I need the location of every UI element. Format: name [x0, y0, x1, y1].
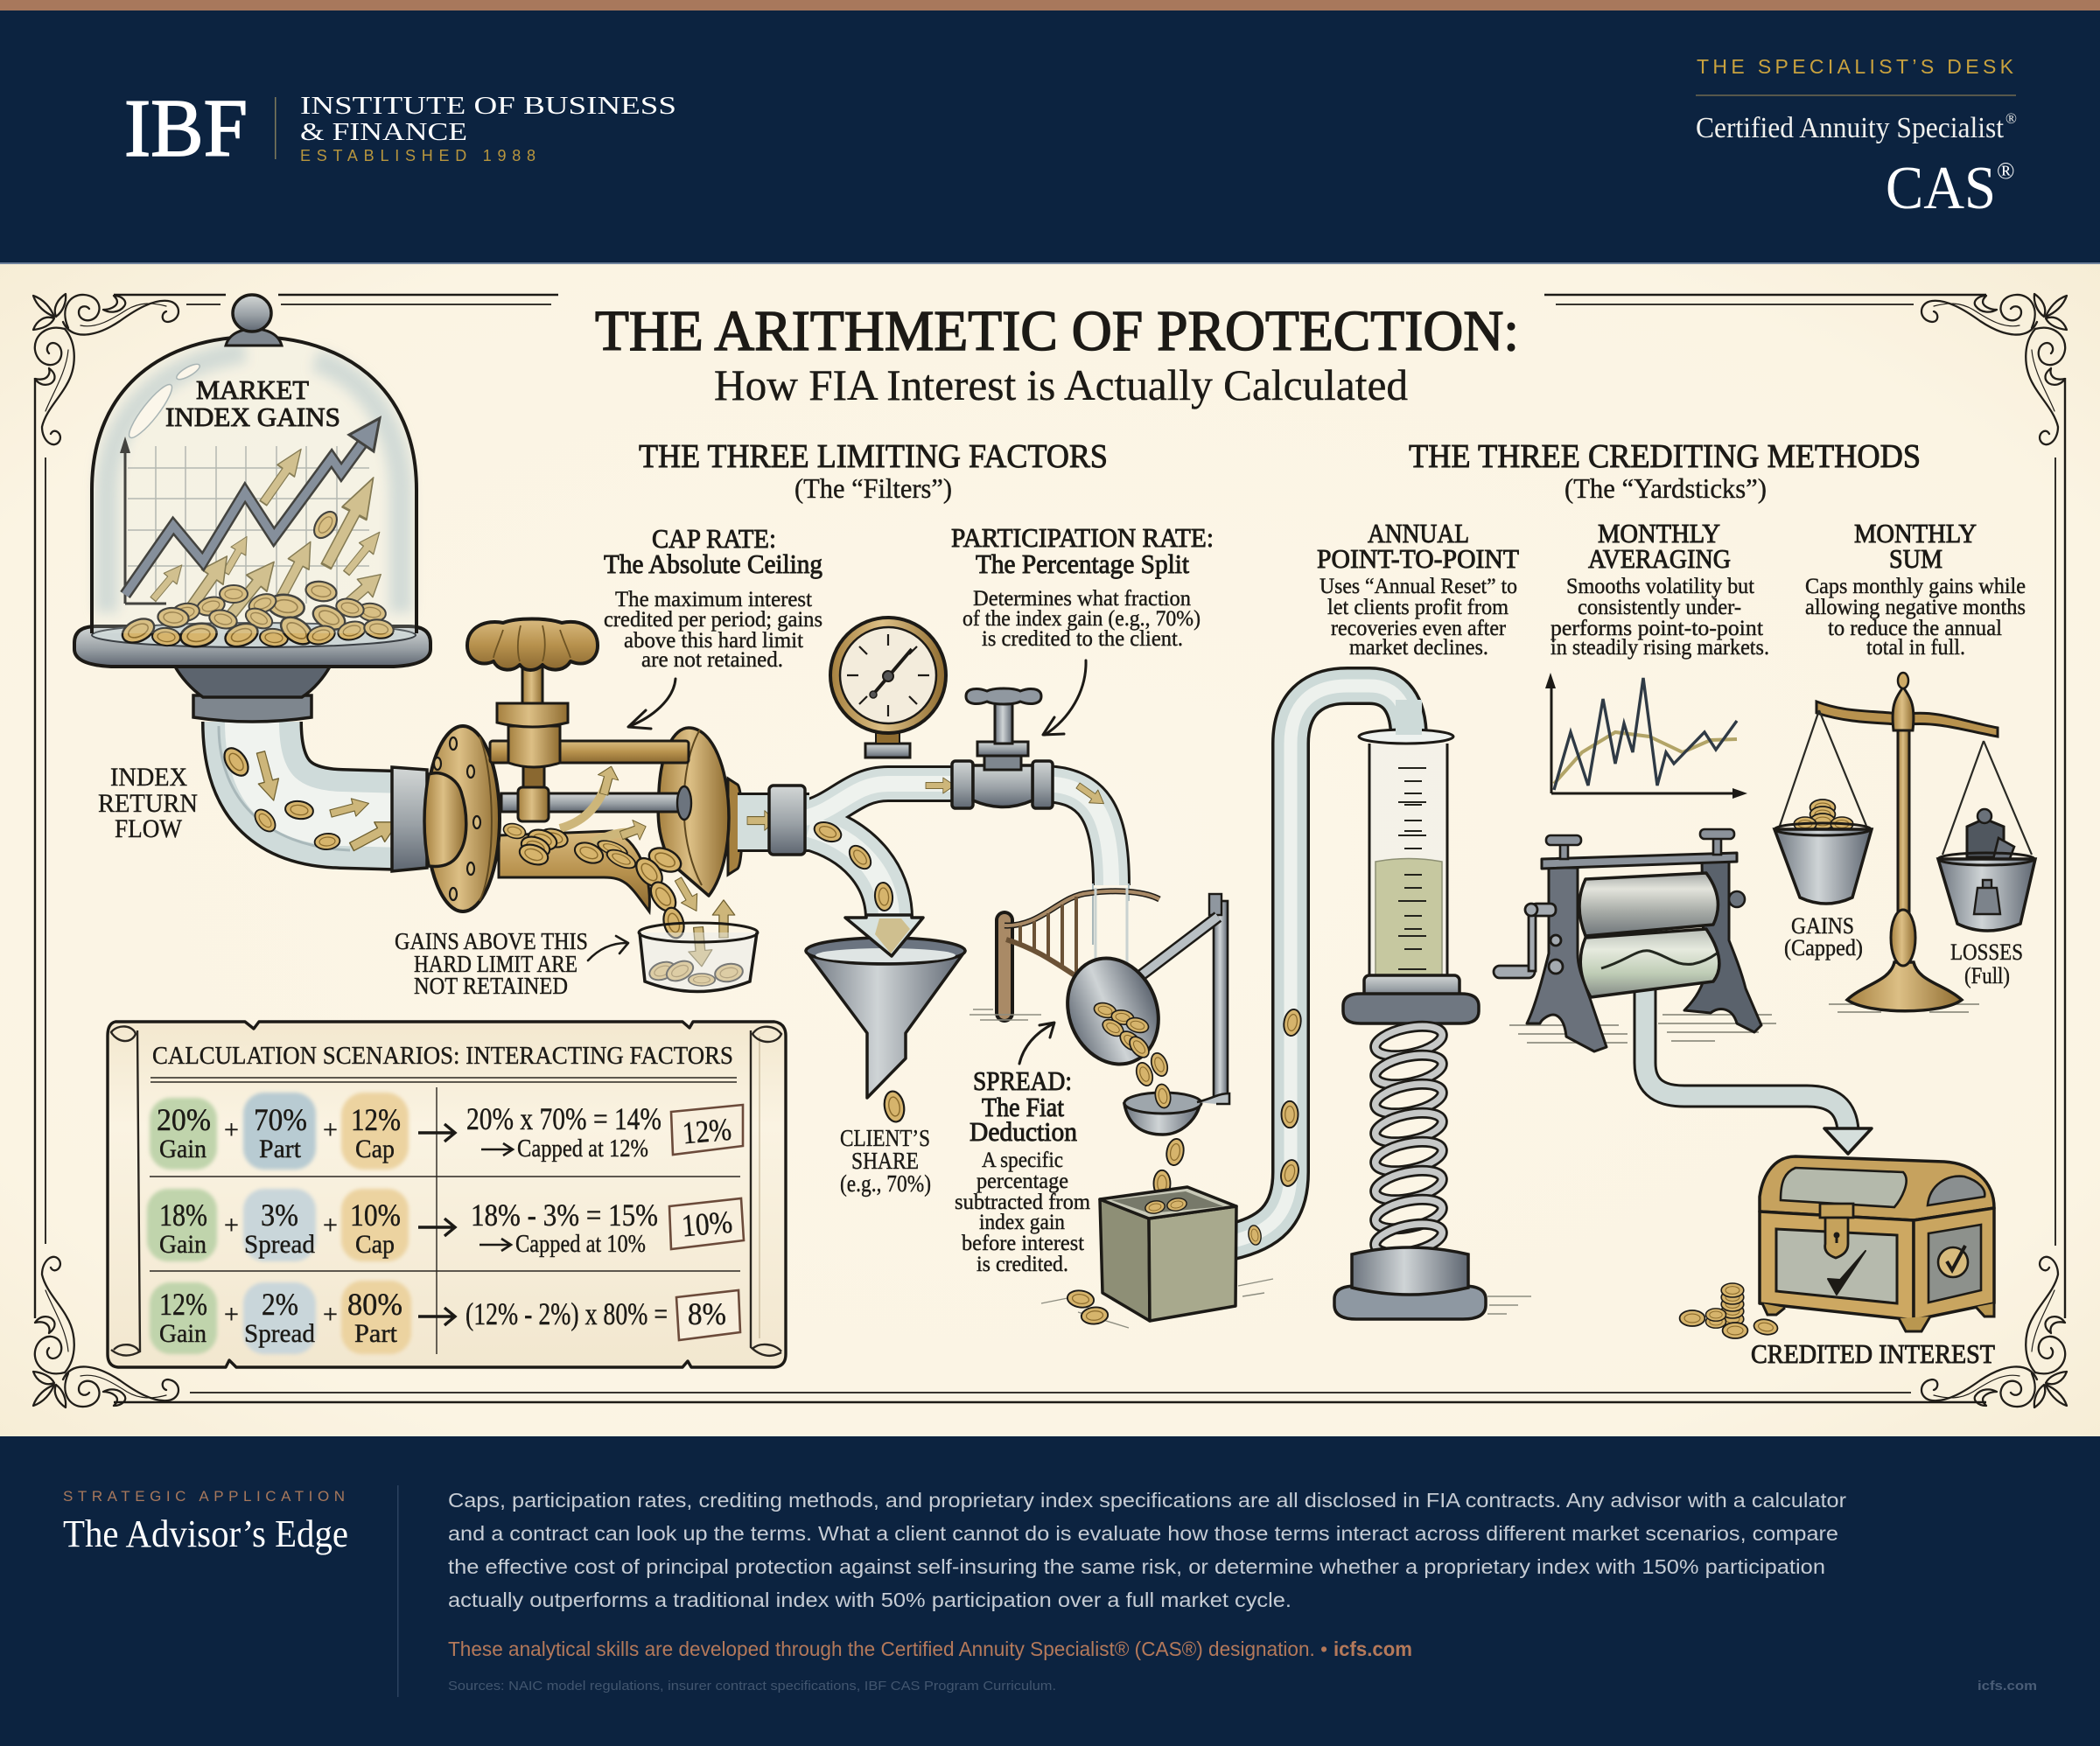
- title: THE ARITHMETIC OF PROTECTION:: [595, 299, 1519, 363]
- CAS: CAS: [1886, 155, 1996, 222]
- desk rule: [1696, 94, 2016, 96]
- right flange rim: [684, 730, 702, 885]
- row 3 chips: 80%: [347, 1287, 402, 1322]
- text block: monthly averaging: performs point-to-point: [1550, 617, 1763, 640]
- row 2 formula: 10%: [680, 1205, 734, 1243]
- text block: monthly averaging: MONTHLY: [1598, 518, 1720, 548]
- right frame: [1684, 862, 1761, 1032]
- text block: cap rate: [604, 523, 822, 672]
- footer eyebrow: STRATEGIC APPLICATION: [63, 1488, 345, 1505]
- label: gains above this hard limit: [395, 928, 588, 999]
- label: credited interest: CREDITED INTEREST: [1751, 1338, 1995, 1369]
- top brass rod: [490, 741, 689, 763]
- row 2 formula: 18% - 3% = 15%: [471, 1198, 658, 1233]
- text block: annual point-to-point: POINT-TO-POINT: [1317, 543, 1519, 574]
- text block: cap rate: CAP RATE:: [652, 523, 776, 554]
- tick marks: [1398, 768, 1426, 969]
- logo divider: [275, 97, 276, 159]
- row 3 formula: +: [323, 1300, 338, 1329]
- footer sources: Sources: NAIC model regulations, insurer contract specifications, IBF CAS Program Curriculum.: [448, 1679, 1056, 1694]
- row 2 chips: Spread: [244, 1230, 315, 1259]
- right bucket with weights: [1938, 809, 2035, 931]
- arrow: cap rate callout: [628, 679, 676, 729]
- row 2 chips: 18%: [159, 1198, 207, 1233]
- specialist desk label: THE SPECIALIST’S DESK: [1697, 55, 2014, 78]
- row 1 chips: Cap: [355, 1135, 395, 1163]
- right flange: [658, 728, 729, 896]
- row 1 formula: Capped at 12%: [517, 1135, 648, 1163]
- text block: annual point-to-point: market declines.: [1349, 636, 1488, 660]
- faded pipe end: [1096, 888, 1127, 980]
- registered mark large: ®: [1997, 157, 2015, 184]
- scale base: [1847, 962, 1962, 1011]
- label: gains capped: (Capped): [1784, 935, 1863, 960]
- text block: monthly sum: MONTHLY: [1854, 518, 1977, 548]
- header band: [0, 10, 2100, 264]
- beam: [1816, 702, 1998, 737]
- arrow: participation callout: [1043, 660, 1086, 735]
- valve knob: [467, 619, 598, 670]
- dome knob: [226, 295, 282, 346]
- illustration: long U pipe to cylinder: [1229, 686, 1409, 1246]
- heading: limiting factors: THE THREE LIMITING FACTORS: [639, 438, 1108, 475]
- glass tube: [1369, 744, 1447, 983]
- ladle: [1124, 1083, 1229, 1135]
- label: losses full: (Full): [1964, 963, 2010, 988]
- footer divider: [397, 1485, 399, 1697]
- row 3 chips: [150, 1281, 411, 1354]
- scoop bowl: [1052, 945, 1174, 1078]
- chart axes: [120, 436, 166, 604]
- text block: participation rate: is credited to the client.: [982, 627, 1183, 651]
- parchment panel: [0, 264, 2100, 1436]
- text block: cap rate: The Absolute Ceiling: [604, 548, 822, 579]
- text block: participation rate: of the index gain (e.g., 70%): [962, 607, 1200, 631]
- arrow: spread callout: [1019, 1023, 1054, 1064]
- illustration: graduated cylinder: [1343, 700, 1479, 1023]
- pipe right of flange: [728, 779, 742, 875]
- bolts: [1546, 829, 1734, 859]
- coin pile: [119, 579, 395, 651]
- chest front: [1760, 1212, 1914, 1320]
- illustration: funnel: [806, 915, 965, 1123]
- text block: participation rate: PARTICIPATION RATE:: [951, 522, 1214, 553]
- row 3 formula: [224, 1290, 740, 1340]
- footer body copy: actually outperforms a traditional index with 50% participation over a full market cycle.: [448, 1589, 1292, 1611]
- footer call to action: icfs.com: [1334, 1638, 1412, 1660]
- label: client's share: SHARE: [851, 1148, 919, 1174]
- text block: spread: A specific: [982, 1149, 1063, 1172]
- institute name: & FINANCE: [300, 118, 467, 146]
- row 2 chips: [147, 1189, 409, 1261]
- bridge railing: [970, 891, 1159, 1020]
- arrow: to cup: [588, 936, 628, 960]
- coins and arrows in pipe: [747, 778, 1109, 911]
- row 2 formula: [224, 1198, 744, 1258]
- panel: calculation scenarios scroll: [108, 1022, 786, 1367]
- text block: monthly sum: [1805, 518, 2026, 660]
- scroll title: CALCULATION SCENARIOS: INTERACTING FACTORS: [152, 1042, 733, 1070]
- row 2 formula: +: [224, 1211, 239, 1240]
- subheading: yardsticks: (The “Yardsticks”): [1564, 472, 1767, 504]
- label: gains capped: [1784, 913, 1863, 960]
- text block: annual point-to-point: let clients profit from: [1327, 596, 1509, 619]
- certified annuity specialist: Certified Annuity Specialist: [1696, 112, 2005, 144]
- illustration: roller press: [1494, 829, 1872, 1154]
- label: gains above this hard limit: NOT RETAINED: [414, 973, 568, 999]
- footer body copy: the effective cost of principal protection against self-insuring the same risk, or determine whether a proprietary index with 150% participation: [448, 1555, 1825, 1578]
- text block: monthly averaging: Smooths volatility but: [1566, 575, 1754, 598]
- illustration: participation tap: [966, 688, 1041, 807]
- collars: [769, 761, 1053, 855]
- row 2 chips: 10%: [350, 1198, 401, 1233]
- label: index return flow: INDEX: [110, 763, 187, 792]
- valve stem and bonnet: [497, 665, 568, 821]
- label: index return flow: [98, 763, 198, 843]
- chart: monthly averaging volatility: [1545, 673, 1747, 799]
- text block: spread: The Fiat: [982, 1092, 1064, 1122]
- row 3 formula: (12% - 2%) x 80% =: [466, 1296, 668, 1331]
- heading: crediting methods: THE THREE CREDITING METHODS: [1409, 438, 1921, 475]
- row 1 formula: 12%: [681, 1112, 732, 1150]
- label: index return flow: RETURN: [98, 789, 198, 818]
- text block: spread: before interest: [962, 1232, 1084, 1255]
- institute name: INSTITUTE OF BUSINESS: [300, 92, 676, 120]
- chest lid: [1760, 1156, 1994, 1220]
- chest feet: [1762, 1303, 1994, 1331]
- inner brass sleeve: [424, 773, 466, 866]
- crank: [1494, 904, 1563, 978]
- text block: annual point-to-point: [1317, 518, 1519, 660]
- subtitle: How FIA Interest is Actually Calculated: [714, 360, 1408, 409]
- scroll rolls: [111, 1026, 781, 1356]
- coin falling: [310, 507, 341, 542]
- illustration: catch cup for excess gains: [639, 900, 758, 992]
- text block: spread: [955, 1065, 1091, 1276]
- row 1 formula: [224, 1101, 743, 1163]
- label: gains above this hard limit: HARD LIMIT ARE: [414, 951, 578, 977]
- text block: participation rate: The Percentage Split: [976, 548, 1189, 579]
- top roller: [1579, 873, 1718, 936]
- top bar: [1542, 853, 1737, 869]
- liquid: [1376, 859, 1442, 980]
- registered mark small: ®: [2006, 110, 2017, 127]
- row 3 chips: Spread: [244, 1319, 315, 1348]
- row 3 formula: +: [224, 1300, 239, 1329]
- text block: spread: percentage: [976, 1170, 1068, 1193]
- glass tint: [107, 352, 401, 612]
- row 2 formula: Capped at 10%: [515, 1230, 646, 1258]
- illustration: balance scale: [1774, 673, 2035, 1012]
- illustration: spread collection box: [1041, 1187, 1273, 1328]
- subheading: filters: (The “Filters”): [794, 472, 952, 504]
- label: index return flow: FLOW: [115, 814, 183, 843]
- base plate: [1343, 994, 1479, 1023]
- illustration: brass cap-rate filter valve: [424, 619, 742, 940]
- text block: participation rate: Determines what fraction: [973, 587, 1191, 611]
- front checkmark: [1828, 1251, 1866, 1295]
- coins in scoop: [1093, 1001, 1152, 1061]
- chart grid: [128, 446, 369, 604]
- text block: monthly averaging: [1550, 518, 1769, 660]
- footer url: icfs.com: [1978, 1679, 2037, 1694]
- row 3 chips: Gain: [159, 1319, 206, 1348]
- lock: [1820, 1204, 1853, 1258]
- lower brass channel: [499, 831, 649, 911]
- text block: annual point-to-point: ANNUAL: [1368, 518, 1469, 548]
- text block: annual point-to-point: recoveries even after: [1331, 617, 1507, 640]
- illustration: bell jar of market index gains: [74, 295, 430, 722]
- post: [1214, 901, 1228, 1098]
- row 1 chips: 20%: [157, 1102, 211, 1137]
- pillar: [1898, 730, 1909, 916]
- left frame: [1527, 868, 1606, 1051]
- row 1 formula: +: [323, 1115, 338, 1144]
- jar base plate: [74, 623, 430, 722]
- label: client's share: CLIENT’S: [840, 1125, 930, 1151]
- text block: spread: index gain: [979, 1211, 1065, 1234]
- label: client's share: [840, 1125, 931, 1197]
- label: losses full: LOSSES: [1950, 939, 2023, 965]
- illustration: silver pipe network with gauge: [738, 761, 1129, 945]
- illustration: treasure chest: [1680, 1156, 1994, 1338]
- row 3 chips: 2%: [262, 1287, 298, 1322]
- footer band: [0, 1436, 2100, 1746]
- strings: [1780, 710, 2032, 855]
- coin stack: [1680, 1283, 1779, 1338]
- row 3 chips: 12%: [159, 1287, 207, 1322]
- illustration: elbow pipe from bell jar: [219, 722, 427, 871]
- row 2 chips: Gain: [159, 1230, 206, 1259]
- side checkmark: [1938, 1246, 1968, 1277]
- row 2 formula: +: [323, 1211, 338, 1240]
- tan arrows and coins in channel: [502, 764, 704, 940]
- text block: monthly averaging: in steadily rising markets.: [1550, 636, 1769, 660]
- cylinder base: [1364, 975, 1460, 1000]
- label: market index gains: INDEX GAINS: [165, 402, 340, 432]
- falling coins: [1133, 1051, 1186, 1197]
- label: market index gains: MARKET: [196, 374, 309, 405]
- illustration: spring: [1373, 1021, 1445, 1259]
- text block: monthly sum: SUM: [1889, 543, 1942, 574]
- illustration: pressure gauge: [830, 618, 946, 758]
- scoop handle: [1138, 917, 1218, 978]
- top accent bar: [0, 0, 2100, 10]
- text block: monthly averaging: consistently under-: [1578, 596, 1741, 619]
- glass dome: [92, 337, 416, 633]
- text block: monthly sum: allowing negative months: [1805, 596, 2026, 619]
- row 1 formula: +: [224, 1115, 239, 1144]
- table rules: [150, 1078, 740, 1354]
- row 1 chips: [150, 1093, 409, 1170]
- text block: annual point-to-point: Uses “Annual Reset” to: [1320, 575, 1517, 598]
- left flange: [426, 726, 500, 911]
- decorative frame: [33, 294, 2067, 1407]
- steel trend arrow: [125, 418, 380, 595]
- footer call to action: These analytical skills are developed through the Certified Annuity Specialist® (CAS®) designation. •: [448, 1638, 1327, 1660]
- text block: spread: Deduction: [970, 1116, 1077, 1147]
- row 3 formula: 8%: [688, 1296, 726, 1331]
- text block: spread: subtracted from: [955, 1191, 1091, 1214]
- bottom roller: [1580, 929, 1719, 997]
- chest side: [1914, 1208, 1994, 1320]
- row 1 chips: 70%: [254, 1102, 307, 1137]
- text block: monthly sum: Caps monthly gains while: [1805, 575, 2026, 598]
- tan gain arrows: [147, 443, 388, 623]
- logo: IBF: IBF: [124, 83, 248, 174]
- text block: monthly sum: total in full.: [1866, 636, 1965, 660]
- label: market index gains: [165, 374, 340, 432]
- label: gains capped: GAINS: [1791, 913, 1854, 939]
- row 2 chips: Cap: [355, 1230, 395, 1259]
- row 1 chips: Gain: [159, 1135, 206, 1163]
- row 1 chips: Part: [259, 1135, 302, 1163]
- label: losses full: [1950, 939, 2023, 988]
- text block: cap rate: are not retained.: [641, 648, 783, 672]
- text block: monthly averaging: AVERAGING: [1588, 543, 1731, 574]
- label: gains above this hard limit: GAINS ABOVE THIS: [395, 928, 588, 954]
- text block: cap rate: above this hard limit: [624, 629, 803, 653]
- text block: cap rate: credited per period; gains: [604, 608, 822, 632]
- illustration: spread bridge, scoop and ladle: [970, 888, 1229, 1197]
- pipe out of press: [1645, 988, 1872, 1154]
- row 2 chips: 3%: [261, 1198, 298, 1233]
- text block: spread: SPREAD:: [973, 1065, 1072, 1096]
- row 1 chips: 12%: [351, 1102, 401, 1137]
- text block: monthly sum: to reduce the annual: [1828, 617, 2002, 640]
- illustration: spring pedestal: [1334, 1247, 1531, 1319]
- institute name: [300, 92, 676, 146]
- established line: ESTABLISHED 1988: [300, 147, 536, 164]
- label: client's share: (e.g., 70%): [840, 1170, 931, 1197]
- floor hatching: [1509, 1015, 1776, 1043]
- footer body copy: and a contract can look up the terms. What a client cannot do is evaluate how those terms interact across different market scenarios, compare: [448, 1522, 1838, 1545]
- row 3 chips: Part: [354, 1319, 398, 1348]
- footer heading: The Advisor’s Edge: [63, 1512, 348, 1555]
- text block: participation rate: [951, 522, 1214, 651]
- footer body copy: [448, 1489, 1846, 1611]
- row 1 formula: 20% x 70% = 14%: [466, 1101, 662, 1136]
- front panel: [1776, 1229, 1897, 1303]
- text block: spread: is credited.: [976, 1253, 1068, 1276]
- footer body copy: Caps, participation rates, crediting methods, and proprietary index specifications are all disclosed in FIA contracts. Any advisor with a calculator: [448, 1489, 1846, 1512]
- text block: cap rate: The maximum interest: [615, 588, 812, 611]
- left bucket with coins: [1774, 800, 1872, 904]
- steel rod: [501, 786, 691, 820]
